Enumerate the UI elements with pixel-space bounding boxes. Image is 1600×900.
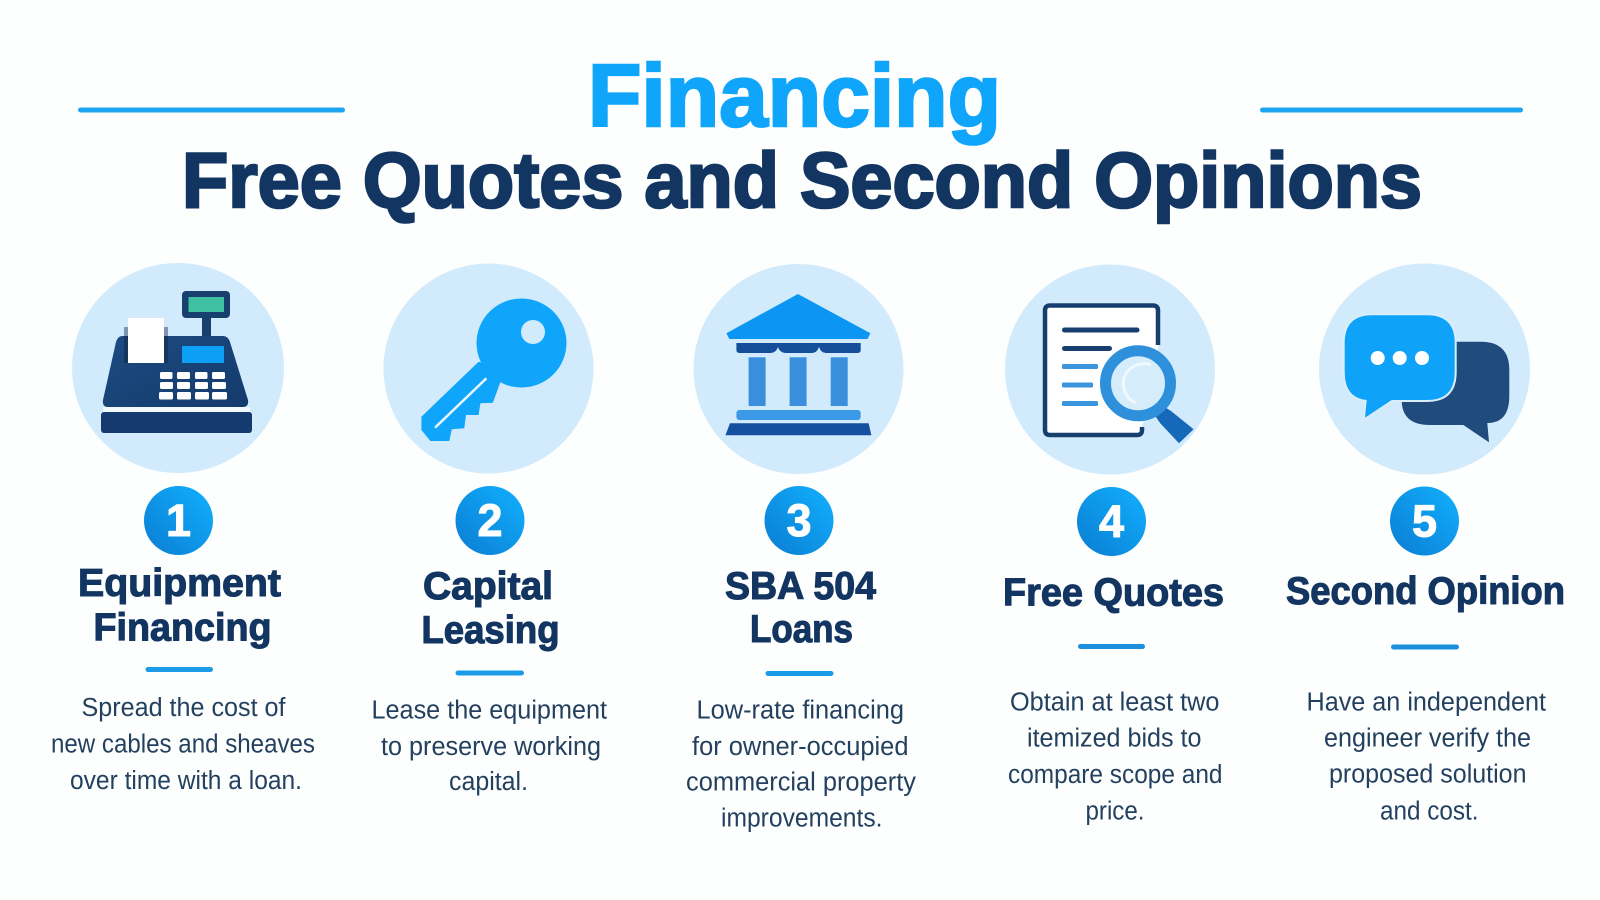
description: Spread the cost of <box>82 694 286 722</box>
heading: Equipment <box>78 562 281 605</box>
description: price. <box>1086 797 1144 825</box>
heading: Free Quotes <box>1003 572 1224 614</box>
description: compare scope and <box>1008 761 1222 789</box>
description: and cost. <box>1380 797 1478 825</box>
description: new cables and sheaves <box>51 730 315 758</box>
heading <box>725 565 876 651</box>
header <box>78 46 1523 224</box>
icon: bank building <box>694 264 904 474</box>
heading: Financing <box>94 606 272 650</box>
number badge 4: 4 <box>1099 496 1124 547</box>
heading: Leasing <box>422 609 560 652</box>
number badge 3 <box>764 486 834 555</box>
heading: Second Opinion <box>1286 570 1565 613</box>
icon: speech bubbles <box>1319 264 1530 474</box>
heading <box>422 565 560 652</box>
divider <box>146 667 213 672</box>
panel: Equipment Financing <box>51 263 315 795</box>
number badge 5 <box>1390 486 1459 556</box>
number badge 2: 2 <box>477 495 503 546</box>
description <box>1008 688 1222 825</box>
panel: Capital Leasing <box>372 264 607 796</box>
description <box>51 694 315 795</box>
number badge 4 <box>1077 487 1146 556</box>
number badge 2 <box>456 486 524 555</box>
description: Have an independent <box>1306 688 1546 716</box>
heading: Capital <box>423 565 553 608</box>
panel: Free Quotes <box>1003 264 1224 825</box>
title line: Free Quotes and Second Opinions: Free Quotes and Second Opinions <box>182 136 1422 224</box>
title line: Financing: Financing <box>588 46 1001 145</box>
icon: document with magnifier <box>1005 264 1215 474</box>
description: Obtain at least two <box>1010 688 1220 716</box>
description: engineer verify the <box>1324 724 1531 752</box>
description: for owner-occupied <box>692 733 908 761</box>
right header rule <box>1260 108 1523 112</box>
description: proposed solution <box>1329 760 1526 788</box>
description: Lease the equipment <box>372 696 607 724</box>
number badge 3: 3 <box>786 495 812 546</box>
panel: SBA 504 Loans <box>686 264 916 832</box>
number badge 1: 1 <box>166 495 191 546</box>
heading: SBA 504 <box>725 565 876 608</box>
heading <box>78 562 281 650</box>
number badge 5: 5 <box>1412 496 1437 546</box>
description: Low-rate financing <box>696 696 904 724</box>
divider <box>1391 644 1459 650</box>
description <box>1306 688 1546 825</box>
left header rule <box>78 108 345 112</box>
description: over time with a loan. <box>70 767 302 795</box>
divider <box>766 671 834 676</box>
divider <box>456 670 524 676</box>
icon: cash register <box>72 263 284 473</box>
description: to preserve working <box>381 733 601 761</box>
description: capital. <box>449 768 528 796</box>
description <box>372 696 607 796</box>
heading: Loans <box>750 608 853 651</box>
divider <box>1078 644 1145 649</box>
description <box>686 696 916 832</box>
description: commercial property <box>686 768 916 796</box>
number badge 1 <box>144 486 213 555</box>
panel: Second Opinion <box>1286 264 1565 825</box>
description: improvements. <box>721 804 882 832</box>
description: itemized bids to <box>1027 724 1202 752</box>
icon: key <box>384 264 594 474</box>
